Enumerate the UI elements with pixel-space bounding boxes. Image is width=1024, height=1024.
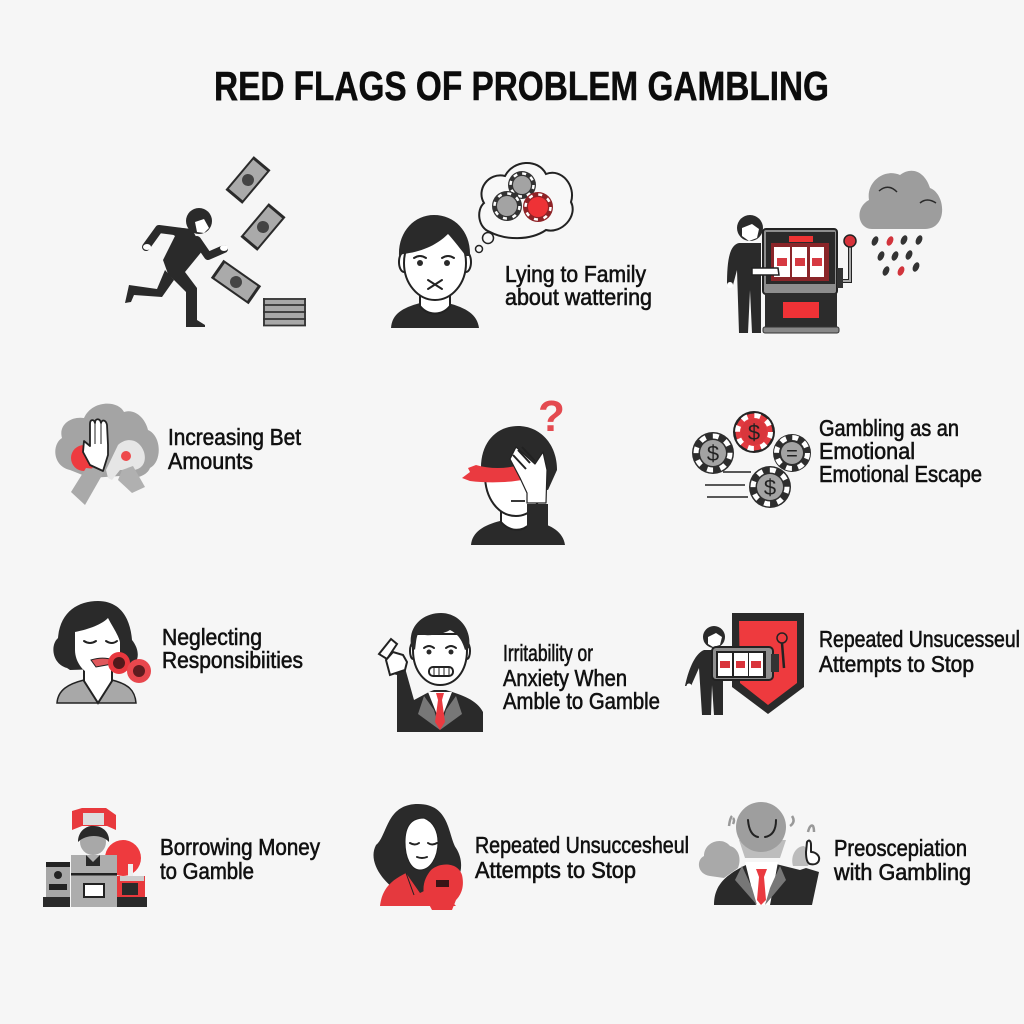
label: with Gambling — [833, 859, 971, 885]
icon: poker chips: $ — [764, 475, 776, 500]
label: to Gamble — [160, 858, 254, 884]
icon: poker chips — [692, 411, 811, 508]
icon: falling banknote two — [240, 203, 286, 251]
icon: grinning man in suit — [379, 613, 483, 732]
label: Emotional Escape — [819, 461, 982, 487]
icon: poker chips: $ — [748, 420, 760, 445]
icon: angry man in suit with smoke — [699, 802, 819, 905]
icon: stack of cash — [263, 298, 306, 326]
label: Neglecting — [162, 624, 262, 650]
label: Attempts to Stop — [475, 857, 636, 883]
panel: irritability — [379, 613, 660, 732]
icon: shield with slot machine and person — [685, 613, 804, 715]
label: Gambling as an — [819, 415, 959, 441]
label: about wattering — [505, 284, 652, 310]
label: Responsibiities — [162, 647, 303, 673]
icon: running man — [125, 208, 228, 327]
icon: falling banknote one — [225, 156, 271, 204]
label: Amble to Gamble — [503, 688, 660, 714]
label: Emotional — [819, 438, 915, 464]
icon: cloud with raised hand — [55, 404, 159, 505]
panel: repeated attempts shield — [685, 613, 1020, 715]
icon: rain cloud — [859, 171, 942, 277]
panel: running after money — [125, 156, 306, 327]
icon: thought bubble with chips — [476, 163, 573, 252]
icon: man with crossed mouth — [391, 215, 479, 328]
panel: lying to family — [391, 163, 652, 328]
icon: poker chips: = — [786, 443, 798, 465]
panel: preoccupation — [699, 802, 971, 905]
label: Irritability or — [503, 640, 593, 666]
panel: emotional escape — [692, 411, 982, 508]
panel: neglecting responsibilities — [53, 601, 303, 703]
panel: increasing bet amounts — [55, 404, 302, 505]
icon: long-haired woman and glove — [373, 804, 463, 910]
label: Borrowing Money — [160, 834, 320, 860]
panel: borrowing money — [43, 808, 320, 907]
panel: woman with boxing glove — [373, 804, 689, 910]
icon: person at slot machine — [727, 215, 856, 333]
icon: woman with chips — [53, 601, 151, 703]
label: Repeated Unsuccesheul — [475, 832, 689, 858]
label: Preoscepiation — [834, 835, 967, 861]
icon: teller with machines — [43, 808, 147, 907]
icon: poker chips: $ — [707, 441, 719, 466]
label: Lying to Family — [505, 261, 646, 287]
label: Anxiety When — [503, 665, 627, 691]
label: Increasing Bet — [168, 424, 302, 450]
title: RED FLAGS OF PROBLEM GAMBLING — [214, 63, 829, 109]
panel: blindfolded person — [462, 392, 565, 545]
icon: question mark: ? — [538, 392, 565, 441]
icon: falling banknote three — [211, 260, 261, 304]
label: Attempts to Stop — [819, 651, 974, 677]
icon: blindfolded head with hand — [462, 426, 565, 545]
panel: slot machine and rain — [727, 171, 942, 333]
label: Amounts — [168, 448, 253, 474]
